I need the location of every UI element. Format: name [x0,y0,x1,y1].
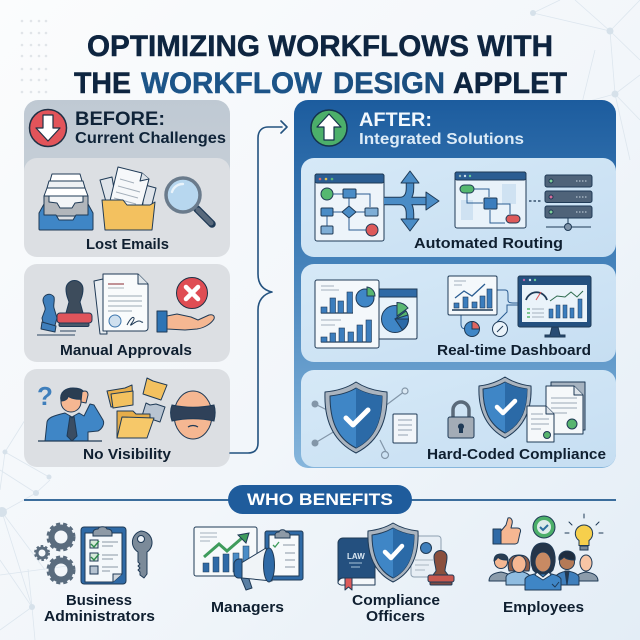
card: real-time dashboard [301,264,616,362]
label: manual approvals: Manual Approvals [60,343,192,359]
label: compliance officers: Compliance [352,593,440,609]
card: automated routing [301,158,616,257]
decorative dots [21,20,47,93]
who benefits pill: WHO BENEFITS [247,490,393,509]
icon: bar chart report [315,280,379,348]
icon: stamps [37,281,92,335]
icon: small document [393,414,417,443]
title: THE [74,67,131,100]
icon: flowchart window [315,174,384,241]
title: DESIGN [333,67,445,100]
icon: stamp [428,551,454,585]
label: managers: Managers [211,600,284,616]
after heading: AFTER: [359,110,432,131]
label: real-time dashboard: Real-time Dashboard [437,343,591,359]
label: employees: Employees [503,600,584,616]
icon: mini pie and gauge [464,322,508,336]
icon: growth chart [194,527,257,576]
icon: trend report [448,276,497,315]
icon: question mark: ? [37,381,53,411]
icon: key [132,531,152,578]
icon: padlock [448,402,474,438]
icon: connector lines [461,290,518,329]
label: business administrators: Administrators [44,609,155,625]
icon: network lines [315,388,408,458]
title: APPLET [453,67,567,100]
benefit: compliance officers [338,523,454,625]
icon: megaphone [234,548,274,590]
icon: gears [35,524,74,583]
icon: large shield [325,382,387,453]
title: OPTIMIZING WORKFLOWS WITH [87,30,553,63]
benefit: managers [194,527,303,616]
benefit: employees [489,514,603,616]
icon: check badge [533,516,555,538]
card: hard-coded compliance [301,370,616,467]
icon: server rack [545,175,592,230]
label: lost emails: Lost Emails [86,237,169,253]
icon: red down arrow [30,110,66,146]
icon: checklist clipboard [81,527,126,584]
icon: thumbs up [493,518,521,544]
label: hard-coded compliance: Hard-Coded Compliance [427,447,606,463]
before heading: Current Challenges [75,130,226,147]
label: compliance officers [352,593,440,625]
benefit: business administrators [35,524,155,625]
panel: after [294,100,616,468]
section rule [24,499,616,501]
icon: law book: LAW [347,552,365,561]
arrow: connector brace [230,121,287,453]
icon: green up arrow [311,110,347,146]
panel: before [24,100,230,467]
icon: magnifier [166,178,212,224]
label: business administrators [44,593,155,625]
card: lost emails [24,158,230,257]
icon: blindfolded head [170,391,215,439]
icon: process window [455,172,526,228]
dotted link [529,200,541,202]
who benefits pill [228,485,412,514]
label: no visibility: No Visibility [83,447,171,463]
icon: open hand [157,311,214,332]
icon: shield and documents [479,377,585,442]
title: WORKFLOW [141,67,323,100]
icon: red x [176,278,208,308]
label: automated routing: Automated Routing [414,236,563,252]
title [74,30,567,100]
arrow: three-way split [384,171,439,231]
icon: id card [411,536,441,577]
icon: dashboard monitor [518,276,591,337]
icon: scattered folders [107,378,167,438]
icon: folder with papers [100,167,156,230]
icon: shield [368,523,418,582]
icon: clipboard [265,530,303,580]
after heading: Integrated Solutions [359,131,524,148]
before heading: BEFORE: [75,109,165,130]
label: compliance officers: Officers [366,609,425,625]
icon: report window [378,289,417,339]
label: business administrators: Business [66,593,132,609]
icon: inbox tray [39,174,93,230]
before heading [75,109,226,147]
icon: light bulb [565,514,603,550]
card: manual approvals [24,264,230,362]
card: no visibility [24,369,230,467]
after heading [359,110,524,148]
icon: team of people [489,543,598,590]
icon: signed document [94,274,148,334]
icon: confused person [38,388,104,441]
